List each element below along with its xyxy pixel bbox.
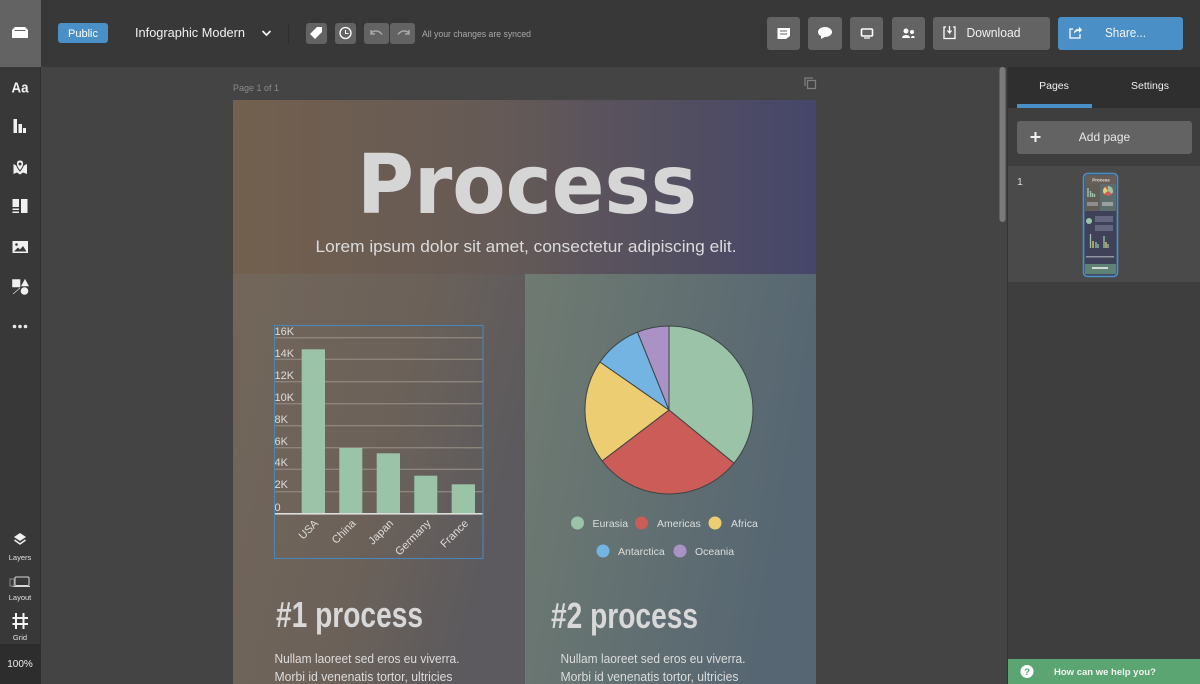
download button: Download: [966, 26, 1021, 40]
page label: Page 1 of 1: [233, 83, 279, 94]
share button: [1058, 17, 1183, 50]
icon: team button: [892, 17, 925, 50]
help bar: [1008, 659, 1200, 684]
share button: Share...: [1105, 26, 1146, 40]
legend: [571, 516, 758, 558]
layout tool: Layout: [9, 593, 32, 602]
y axis labels: [274, 326, 295, 514]
document name: Infographic Modern: [135, 26, 245, 40]
y axis labels: 0: [274, 502, 281, 514]
thumbnail: Process: [1092, 178, 1110, 182]
body text: [274, 652, 460, 684]
x axis labels: France: [438, 518, 471, 550]
download button: [933, 17, 1050, 50]
icon: undo and redo: [364, 23, 415, 44]
panel: top toolbar: [0, 0, 1200, 67]
icon: present button: [850, 17, 883, 50]
tabs: [1008, 67, 1200, 108]
zoom level: [0, 644, 41, 684]
x axis labels: USA: [297, 517, 322, 542]
y axis labels: 6K: [274, 436, 289, 448]
zoom level: 100%: [7, 659, 33, 670]
grid tool: [12, 613, 28, 642]
logo button: [0, 0, 41, 67]
icon: shapes: [12, 280, 28, 294]
scrollbar: [1000, 67, 1006, 222]
legend: Americas: [657, 518, 701, 530]
legend: Eurasia: [592, 518, 628, 530]
bars: [302, 349, 475, 514]
help bar: How can we help you?: [1054, 667, 1156, 678]
bar chart: [274, 326, 483, 558]
selection box: [274, 326, 483, 558]
icon: notes button: [767, 17, 800, 50]
icon: clock: [335, 23, 356, 44]
legend: Africa: [731, 518, 758, 530]
x axis labels: Germany: [393, 517, 434, 558]
icon: text: Aa: [12, 80, 29, 96]
public button: [58, 23, 108, 43]
x axis labels: [297, 517, 471, 558]
y axis labels: 8K: [274, 414, 289, 426]
icon: tag: [306, 23, 327, 44]
icon: chart: [14, 119, 26, 133]
thumbnail: [1084, 174, 1118, 276]
panel: right sidebar: [1007, 67, 1200, 684]
heading: #2 process: [551, 595, 698, 636]
icon: map: [14, 160, 27, 174]
panel: left sidebar: [0, 67, 41, 684]
add page button: [1017, 121, 1192, 154]
x axis labels: Japan: [366, 518, 396, 547]
page thumbnail row: 1: [1017, 176, 1023, 188]
y axis labels: 2K: [274, 479, 289, 491]
y axis labels: 14K: [274, 348, 295, 360]
x axis labels: China: [330, 517, 359, 546]
subtitle: Lorem ipsum dolor sit amet, consectetur adipiscing elit.: [316, 237, 736, 256]
layout tool: [9, 577, 32, 602]
icon: image: [12, 241, 28, 253]
page thumbnail row: [1008, 166, 1200, 282]
sync status: All your changes are synced: [422, 29, 531, 39]
layers tool: [9, 533, 32, 562]
tabs: Settings: [1131, 80, 1169, 92]
body text: Morbi id venenatis tortor, ultricies: [274, 670, 452, 684]
heading: #1 process: [276, 594, 423, 635]
icon: shape circle: [21, 287, 28, 295]
y axis labels: 10K: [274, 392, 295, 404]
icon: duplicate page: [805, 78, 816, 88]
y axis labels: 4K: [274, 457, 289, 469]
body text: [560, 652, 746, 684]
y axis labels: 16K: [274, 326, 295, 338]
public button: Public: [68, 28, 98, 40]
panel: process 1: [233, 274, 525, 684]
icon: more: [13, 325, 27, 328]
body text: Morbi id venenatis tortor, ultricies: [560, 670, 738, 684]
icon: layout blocks: [12, 199, 28, 213]
layers tool: Layers: [9, 553, 32, 562]
icon: comment button: [808, 17, 842, 50]
body text: Nullam laoreet sed eros eu viverra.: [560, 652, 746, 666]
pie chart: [585, 326, 753, 494]
body text: Nullam laoreet sed eros eu viverra.: [274, 652, 460, 666]
add page button: Add page: [1079, 130, 1131, 144]
legend: Oceania: [695, 546, 734, 558]
tabs: Pages: [1039, 80, 1069, 92]
panel: process 2: [525, 274, 816, 684]
icon: chevron: [262, 31, 270, 35]
legend: Antarctica: [618, 546, 665, 558]
help bar: ?: [1024, 667, 1030, 678]
y axis labels: 12K: [274, 370, 295, 382]
panel: header band: [233, 100, 816, 274]
grid tool: Grid: [13, 633, 27, 642]
panel: infographic page: [233, 78, 816, 684]
title: Process: [357, 138, 697, 233]
